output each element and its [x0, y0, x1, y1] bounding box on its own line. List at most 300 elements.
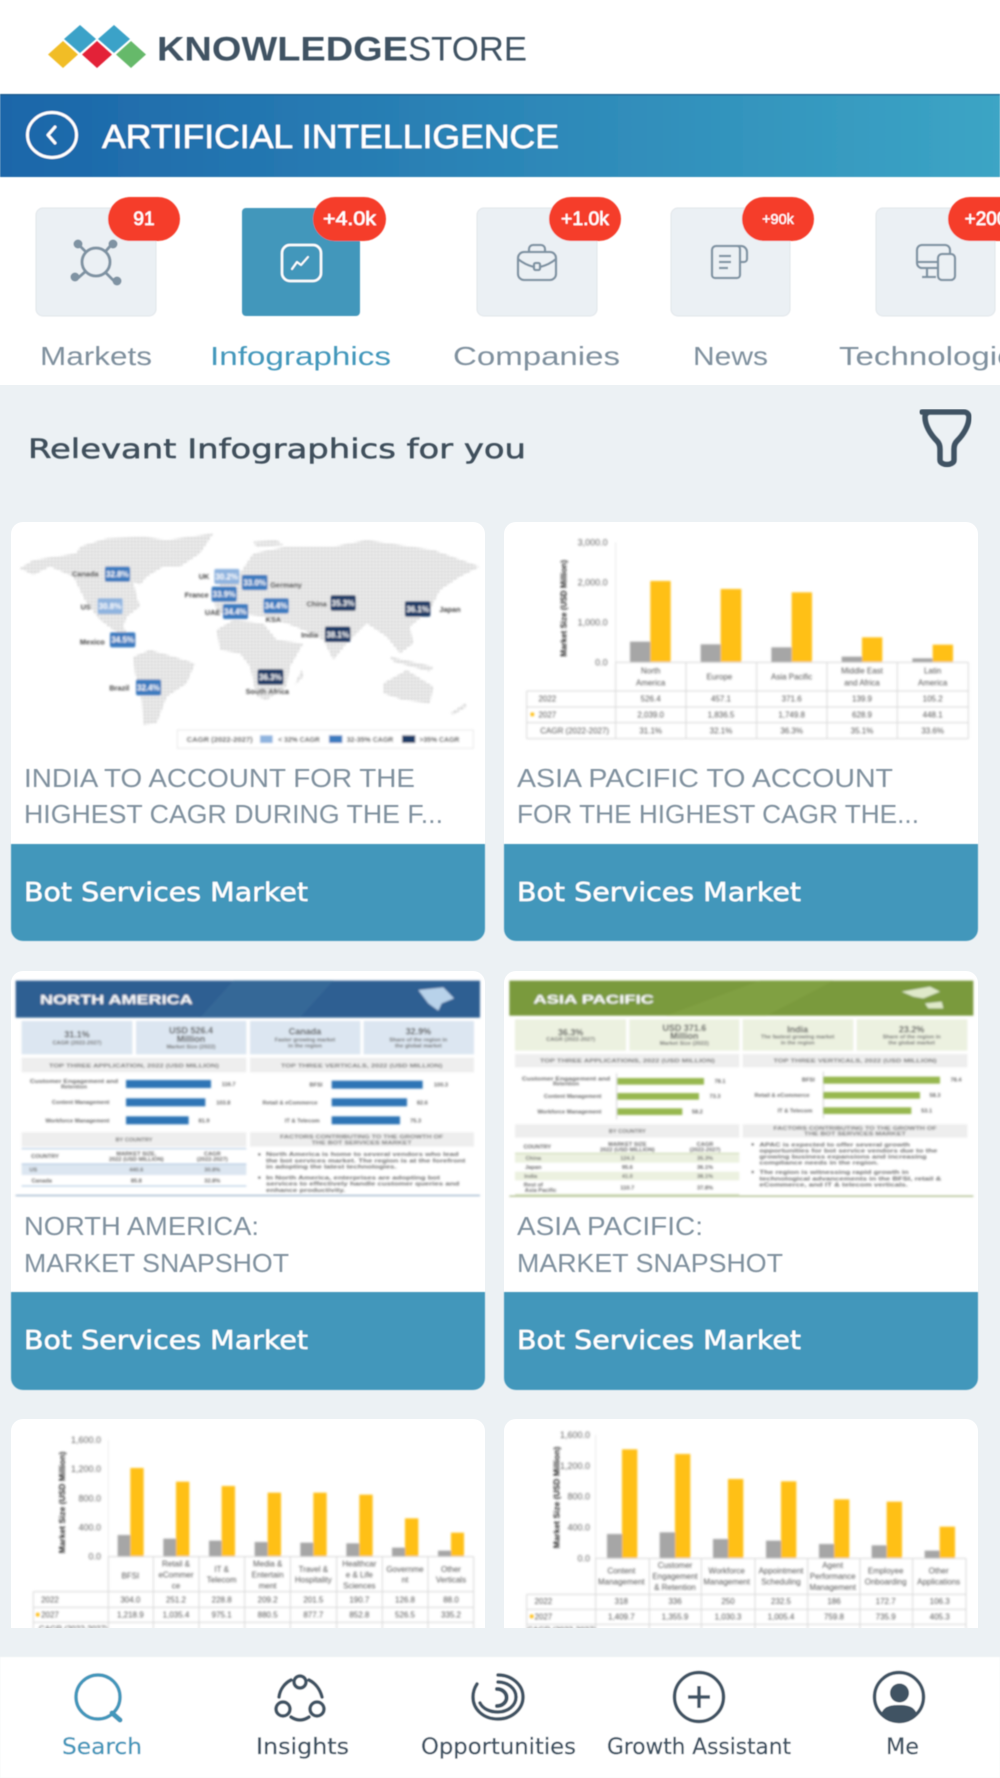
- snapshot country table: 37.8%: [697, 1185, 713, 1191]
- chart data table: Travel &: [299, 1565, 329, 1574]
- icon: briefcase: [518, 245, 556, 280]
- chart data table: Healthcar: [342, 1560, 377, 1569]
- chart data table: Media &: [253, 1560, 283, 1569]
- chart data table: 759.8: [824, 1612, 845, 1621]
- snapshot KPI boxes: CAGR (2022-2027): [52, 1040, 102, 1046]
- snapshot growth factors: [752, 1142, 941, 1189]
- map callouts: UAE: [205, 608, 221, 617]
- label: News: News: [693, 341, 768, 371]
- chart data table: Other: [929, 1567, 949, 1576]
- chart data table: ment: [259, 1581, 277, 1590]
- snapshot KPI boxes: 23.2%: [899, 1024, 924, 1034]
- snapshot country table: COUNTRY: [31, 1154, 59, 1160]
- heading: section title: ARTIFICIAL INTELLIGENCE: [102, 118, 559, 155]
- chart data table: 106.3: [930, 1597, 950, 1606]
- map callouts: Brazil: [109, 683, 129, 692]
- icon: insights network: [276, 1676, 324, 1720]
- snapshot bars: Workforce Management: [45, 1118, 109, 1124]
- chart data table: 88.0: [443, 1596, 459, 1605]
- chart data table: & Retention: [654, 1583, 696, 1592]
- snapshot growth factors: enhance productivity.: [266, 1188, 346, 1194]
- snapshot country table: [515, 1142, 739, 1195]
- map legend: 32-35% CAGR: [347, 735, 394, 744]
- snapshot growth factors: [258, 1152, 465, 1194]
- nav item: Insights: [256, 1676, 349, 1760]
- snapshot KPI boxes: [515, 1019, 967, 1051]
- chart data table: 31.1%: [639, 727, 662, 736]
- world map thumbnail: [20, 533, 480, 748]
- map continents: [20, 533, 480, 725]
- chart data table: Entertain: [252, 1571, 284, 1580]
- application bar chart thumbnail: [527, 1430, 966, 1635]
- snapshot country table: MARKET SIZE,: [116, 1151, 157, 1157]
- badge: +4.0k: [313, 197, 386, 241]
- snapshot bars: Retail & eCommerce: [262, 1100, 318, 1106]
- snapshot section headings: TOP THREE APPLICATIONS, 2022 (USD MILLION): [540, 1059, 715, 1065]
- snapshot growth factors: eCommerce, and IT & telecom verticals.: [759, 1183, 909, 1189]
- snapshot bars: Content Management: [52, 1100, 110, 1106]
- chart data table: Customer: [658, 1561, 693, 1570]
- snapshot growth factors: opportunities for bot service vendors due to the: [759, 1148, 937, 1154]
- snapshot bars: Retail & eCommerce: [754, 1093, 810, 1099]
- snapshot country table: 41.0: [622, 1174, 633, 1180]
- chart data table: 250: [721, 1597, 735, 1606]
- snapshot bars: 116.7: [222, 1082, 236, 1088]
- chart data table: Management: [703, 1578, 751, 1587]
- chart bars: [607, 1449, 955, 1558]
- map callouts: 34.4%: [224, 607, 247, 616]
- chart data table: Engagement: [652, 1572, 698, 1581]
- card caption: ASIA PACIFIC:: [517, 1211, 703, 1241]
- map callouts: Germany: [270, 580, 303, 589]
- snapshot growth factors: In North America, enterprises are adopting bot: [266, 1175, 440, 1181]
- nav item: Growth Assistant: Growth Assistant: [607, 1735, 791, 1760]
- badge: +90k: [742, 197, 814, 241]
- snapshot KPI boxes: Million: [670, 1031, 699, 1041]
- snapshot KPI boxes: Faster growing market: [275, 1038, 335, 1044]
- chart data table: 335.2: [441, 1611, 462, 1620]
- card: Asia Pacific to account: [504, 522, 978, 941]
- chart data table: America: [636, 678, 666, 687]
- chart data table: Onboarding: [865, 1578, 907, 1587]
- map callouts: 32.8%: [106, 570, 129, 579]
- chart bars: [118, 1468, 464, 1557]
- snapshot KPI boxes: Share of the region in: [389, 1038, 448, 1044]
- snapshot bars: 82.6: [417, 1100, 428, 1106]
- snapshot bars: 78.1: [714, 1079, 726, 1085]
- snapshot country table: 85.8: [131, 1178, 142, 1184]
- chart axis and labels: Market Size (USD Million): [560, 560, 569, 657]
- snapshot growth factors: The region is witnessing rapid growth in: [759, 1170, 909, 1176]
- snapshot KPI boxes: Market Size (2022): [166, 1045, 216, 1051]
- chart data table: Retail &: [162, 1560, 191, 1569]
- map legend: CAGR (2022-2027): [187, 735, 253, 744]
- chart axis and labels: 3,000.0: [578, 538, 608, 548]
- map callouts: 38.1%: [326, 630, 349, 639]
- title bar: Artificial Intelligence: [0, 94, 1000, 177]
- map callouts: Canada: [72, 570, 99, 579]
- snapshot section headings: THE BOT SERVICES MARKET: [312, 1140, 412, 1146]
- chart axis and labels: 2,000.0: [578, 578, 608, 588]
- chart data table: 2027: [41, 1611, 59, 1620]
- chart data table: 33.6%: [921, 727, 944, 736]
- snapshot country table: COUNTRY: [523, 1145, 551, 1151]
- vertical bar chart thumbnail: [33, 1435, 474, 1634]
- badge: 91: 91: [133, 209, 155, 230]
- chart data table: 526.4: [641, 694, 661, 703]
- snapshot country table: 2022 (USD MILLION): [109, 1157, 164, 1163]
- snapshot bars: Workforce Management: [537, 1109, 601, 1115]
- chart axis and labels: 0.0: [88, 1552, 101, 1562]
- snapshot section headings: BY COUNTRY: [115, 1137, 153, 1143]
- label: Infographics: Infographics: [210, 341, 391, 371]
- snapshot banner: ASIA PACIFIC: [533, 992, 654, 1006]
- chart data table: CAGR (2022-2027): [540, 727, 609, 736]
- snapshot bars: Customer Engagement and: [30, 1079, 119, 1085]
- chart data table: 628.9: [852, 710, 873, 719]
- snapshot bars: 78.4: [950, 1078, 962, 1084]
- nav item: Opportunities: [421, 1675, 576, 1760]
- chart data table: 251.2: [166, 1596, 187, 1605]
- card footer: Bot Services Market: Bot Services Market: [517, 878, 801, 908]
- snapshot bars: 58.3: [929, 1093, 941, 1099]
- chart data table: Scheduling: [761, 1578, 801, 1587]
- chart axis and labels: [552, 1430, 596, 1563]
- chart axis and labels: 400.0: [79, 1523, 101, 1533]
- chart data table: 228.8: [212, 1596, 232, 1605]
- card: verticals bar chart (cut off): [11, 1419, 485, 1634]
- card caption: [517, 1211, 783, 1278]
- snapshot section headings: BY COUNTRY: [609, 1129, 646, 1135]
- card caption: [24, 1211, 289, 1278]
- badge: +90k: +90k: [762, 212, 795, 228]
- chart axis and labels: 1,600.0: [71, 1435, 101, 1445]
- icon: chart card: [282, 245, 321, 281]
- card caption: [517, 763, 919, 829]
- card caption: MARKET SNAPSHOT: [517, 1248, 783, 1278]
- card footer: Bot Services Market: [504, 844, 978, 941]
- snapshot country table: MARKET SIZE: [608, 1142, 647, 1148]
- map callouts: India: [301, 630, 319, 639]
- chart data table: 209.2: [258, 1596, 278, 1605]
- chart data table: Applications: [917, 1578, 960, 1587]
- chart data table: nt: [402, 1576, 409, 1585]
- snapshot bars: 100.3: [434, 1083, 448, 1089]
- snapshot bars: [522, 1072, 962, 1119]
- snapshot bars: 81.9: [198, 1118, 210, 1124]
- snapshot bars: Retention: [61, 1084, 88, 1090]
- chart data table: 2022: [538, 694, 557, 703]
- badge: 91: [108, 197, 180, 241]
- badge: +4.0k: +4.0k: [323, 209, 377, 230]
- snapshot country table: Japan: [525, 1165, 542, 1171]
- snapshot bars: 58.2: [692, 1109, 703, 1115]
- snapshot country table: (2022-2027): [197, 1157, 228, 1163]
- chart data table: 32.1%: [710, 727, 732, 736]
- map callouts: France: [185, 590, 209, 599]
- chart data table: 36.3%: [780, 727, 803, 736]
- snapshot country table: 124.3: [620, 1156, 634, 1162]
- snapshot KPI boxes: 31.1%: [64, 1030, 90, 1040]
- chart data table: 35.1%: [851, 727, 873, 736]
- card caption: INDIA TO ACCOUNT FOR THE: [24, 763, 415, 793]
- snapshot section headings: TOP THREE APPLICATION, 2022 (USD MILLION): [49, 1063, 219, 1069]
- snapshot country table: India: [524, 1174, 538, 1180]
- snapshot KPI boxes: Market Size (2022): [660, 1041, 709, 1047]
- snapshot bars: Retention: [553, 1081, 580, 1087]
- snapshot growth factors: growing business expansions and increasing: [759, 1155, 927, 1161]
- chart data table: 371.6: [782, 694, 802, 703]
- label: Technologies: Technologies: [839, 341, 1000, 371]
- chart data table: 304.0: [120, 1596, 141, 1605]
- snapshot growth factors: compliance needs in the region.: [759, 1160, 879, 1166]
- snapshot KPI boxes: 36.3%: [558, 1027, 583, 1037]
- snapshot KPI boxes: the global market: [395, 1044, 442, 1050]
- chart data table: 1,409.7: [608, 1612, 635, 1621]
- chart axis and labels: 0.0: [577, 1553, 590, 1563]
- nav item: Insights: Insights: [256, 1735, 349, 1760]
- chart data table: CAGR (2022-2027): [527, 1626, 596, 1635]
- chart data table: 1,005.4: [768, 1612, 795, 1621]
- chart data table: 735.9: [876, 1612, 896, 1621]
- chart data table: North: [641, 666, 660, 675]
- snapshot country table: China: [525, 1156, 542, 1162]
- chart data table: 457.1: [711, 694, 732, 703]
- nav item: Search: Search: [62, 1735, 142, 1760]
- map callouts: KSA: [266, 615, 282, 624]
- card caption: HIGHEST CAGR DURING THE F...: [24, 799, 443, 829]
- logo wordmark: [157, 30, 527, 68]
- snapshot section headings: [515, 1054, 967, 1138]
- snapshot KPI boxes: [22, 1021, 474, 1054]
- card caption: MARKET SNAPSHOT: [24, 1248, 289, 1278]
- chart data table: Content: [607, 1567, 636, 1576]
- chart data table: Asia Pacific: [771, 672, 812, 681]
- snapshot KPI boxes: USD 371.6: [662, 1023, 706, 1033]
- snapshot bars: IT & Telecom: [285, 1118, 320, 1124]
- snapshot section headings: THE BOT SERVICES MARKET: [804, 1132, 907, 1138]
- chart data table: e & Life: [346, 1571, 373, 1580]
- chart data table: Telecom: [207, 1576, 237, 1585]
- chart data table: 975.1: [212, 1611, 232, 1620]
- chart data table: 232.5: [771, 1597, 792, 1606]
- chart data table: 1,035.4: [163, 1611, 190, 1620]
- logo diamonds: [48, 25, 146, 68]
- chart data table: 1,355.9: [662, 1612, 689, 1621]
- snapshot KPI boxes: the global market: [888, 1040, 935, 1046]
- snapshot country table: 2022 (USD MILLION): [600, 1147, 655, 1153]
- card: applications bar chart (cut off): [504, 1419, 978, 1635]
- chart data table: 405.3: [930, 1612, 950, 1621]
- badge: +1.0k: +1.0k: [561, 209, 610, 230]
- nav item: Growth Assistant: [607, 1672, 791, 1760]
- chart data table: 336: [668, 1597, 682, 1606]
- snapshot growth factors: APAC is expected to offer several growth: [759, 1142, 911, 1148]
- Asia Pacific snapshot thumbnail: [509, 981, 973, 1197]
- icon: plus circle: [674, 1672, 724, 1722]
- snapshot bars: [30, 1079, 448, 1124]
- chart data table: Middle East: [841, 666, 884, 675]
- bottom navigation bar: [0, 1657, 1000, 1778]
- icon: search: [76, 1675, 120, 1720]
- map legend: < 32% CAGR: [278, 735, 320, 744]
- map callouts: China: [306, 600, 328, 609]
- map callouts: Japan: [439, 605, 461, 614]
- badge: +1.0k: [549, 197, 621, 241]
- snapshot KPI boxes: Share of the region in: [883, 1034, 941, 1040]
- chart data table: 880.5: [258, 1611, 278, 1620]
- chart data table: 448.1: [923, 710, 943, 719]
- chart data table: BFSI: [121, 1571, 139, 1580]
- snapshot country table: 32.8%: [204, 1178, 220, 1184]
- snapshot KPI boxes: 32.9%: [406, 1027, 431, 1037]
- card footer: Bot Services Market: [504, 1292, 978, 1390]
- chart data table: Other: [441, 1565, 461, 1574]
- chart axis and labels: 800.0: [568, 1492, 590, 1502]
- chart data table: [527, 662, 968, 739]
- snapshot country table: 440.6: [129, 1167, 143, 1173]
- nav item: Search: [62, 1675, 142, 1760]
- tab: Technologies: [839, 197, 1000, 371]
- snapshot KPI boxes: CAGR (2022-2027): [546, 1037, 595, 1043]
- chart axis and labels: 400.0: [568, 1522, 590, 1532]
- chart axis and labels: [560, 538, 616, 668]
- map callouts: Mexico: [80, 637, 105, 646]
- snapshot bars: 73.3: [709, 1094, 721, 1100]
- chart data table: 2027: [538, 710, 557, 719]
- chart data table: 172.7: [876, 1597, 896, 1606]
- chart data table: Hospitality: [295, 1576, 332, 1585]
- snapshot bars: 53.1: [921, 1108, 932, 1114]
- chart data table: [527, 1558, 966, 1635]
- nav item: Opportunities: Opportunities: [421, 1735, 576, 1760]
- logo wordmark: KNOWLEDGE: [157, 30, 408, 68]
- chart data table: 877.7: [303, 1611, 324, 1620]
- chart data table: 2027: [534, 1612, 553, 1621]
- chart axis and labels: 1,200.0: [71, 1464, 101, 1474]
- snapshot KPI boxes: Canada: [289, 1027, 322, 1037]
- chart data table: 852.8: [349, 1611, 370, 1620]
- snapshot growth factors: in adopting the latest technologies.: [266, 1165, 397, 1171]
- snapshot growth factors: services to effectively handle customer queries and: [266, 1182, 460, 1188]
- card footer: Bot Services Market: [11, 844, 485, 941]
- snapshot country table: 38.1%: [697, 1174, 713, 1180]
- label: Markets: Markets: [40, 341, 152, 371]
- chart axis and labels: [57, 1435, 102, 1561]
- map callouts: US: [81, 603, 91, 612]
- map legend: [177, 730, 473, 748]
- icon: profile: [874, 1672, 924, 1722]
- snapshot banner: [509, 981, 973, 1016]
- snapshot KPI boxes: in the region: [781, 1040, 815, 1046]
- chart data table: Management: [598, 1578, 645, 1587]
- chart data table: 190.7: [349, 1596, 370, 1605]
- North America snapshot thumbnail: [16, 981, 480, 1196]
- snapshot country table: CAGR: [204, 1151, 221, 1157]
- chart data table: 1,218.9: [117, 1611, 144, 1620]
- chart data table: 126.8: [395, 1596, 416, 1605]
- chart data table: Agent: [822, 1561, 844, 1570]
- snapshot KPI boxes: India: [787, 1024, 809, 1034]
- snapshot country table: 110.7: [620, 1185, 634, 1191]
- chart data table: 201.5: [303, 1596, 324, 1605]
- chart data table: IT &: [214, 1565, 230, 1574]
- tab: News: [671, 197, 814, 371]
- label: Companies: Companies: [453, 341, 620, 371]
- snapshot bars: 103.8: [216, 1100, 230, 1106]
- snapshot KPI boxes: Million: [177, 1034, 205, 1044]
- snapshot country table: [22, 1149, 246, 1186]
- snapshot country table: 36.1%: [697, 1165, 713, 1171]
- chart data table: eCommer: [158, 1571, 194, 1580]
- chart data table: Employee: [868, 1567, 904, 1576]
- card caption: NORTH AMERICA:: [24, 1211, 259, 1241]
- snapshot growth factors: the bot services market. The region is at the forefront: [266, 1158, 465, 1164]
- chart data table: 1,836.5: [708, 710, 735, 719]
- chart data table: [33, 1557, 474, 1634]
- snapshot section headings: FACTORS CONTRIBUTING TO THE GROWTH OF: [773, 1126, 937, 1132]
- chart data table: Latin: [924, 666, 941, 675]
- chart data table: Sciences: [343, 1581, 376, 1590]
- chart axis and labels: 0.0: [595, 658, 608, 668]
- chart data table: Europe: [706, 672, 733, 681]
- chart data table: 186: [827, 1597, 841, 1606]
- chart axis and labels: 1,000.0: [578, 618, 608, 628]
- card: North America snapshot: [11, 971, 485, 1390]
- map callouts: 36.1%: [406, 605, 429, 614]
- snapshot country table: (2022-2027): [690, 1147, 721, 1153]
- nav item: Me: Me: [886, 1735, 919, 1760]
- card footer: Bot Services Market: Bot Services Market: [517, 1326, 801, 1356]
- snapshot bars: Customer Engagement and: [522, 1076, 611, 1082]
- snapshot section headings: [22, 1058, 474, 1147]
- chart data table: 2,039.0: [637, 710, 665, 719]
- chart data table: 2022: [41, 1596, 59, 1605]
- map callouts: 32.4%: [137, 683, 160, 692]
- chart bars: [630, 581, 953, 662]
- snapshot KPI boxes: USD 526.4: [169, 1025, 213, 1035]
- snapshot country table: Asia Pacific: [525, 1188, 557, 1194]
- map callouts: UK: [199, 572, 210, 581]
- logo wordmark: STORE: [408, 30, 527, 68]
- map callouts: 34.5%: [111, 636, 134, 645]
- chart data table: Performance: [810, 1572, 856, 1581]
- chart axis and labels: Market Size (USD Million): [552, 1446, 561, 1548]
- chart data table: 105.2: [923, 694, 943, 703]
- map callouts: 33.9%: [213, 590, 235, 599]
- chart data table: Management: [809, 1583, 857, 1592]
- chart data table: Appointment: [759, 1567, 804, 1576]
- chart axis and labels: 1,600.0: [560, 1430, 590, 1440]
- chart data table: Verticals: [436, 1576, 466, 1585]
- snapshot country table: CAGR: [697, 1142, 713, 1148]
- tab: Infographics (active): [210, 197, 391, 371]
- snapshot section headings: TOP THREE VERTICALS, 2022 (USD MILLION): [773, 1059, 937, 1065]
- chart axis and labels: Market Size (USD Million): [58, 1451, 67, 1553]
- icon: back arrow: [28, 112, 76, 158]
- heading: Relevant Infographics for you: Relevant Infographics for you: [28, 434, 526, 465]
- icon: news document: [712, 246, 747, 278]
- map callouts: 34.4%: [265, 602, 287, 611]
- map callouts: [72, 567, 461, 696]
- map callouts: 30.8%: [99, 602, 121, 611]
- tab: Markets: [36, 197, 180, 371]
- snapshot country table: 95.6: [622, 1165, 633, 1171]
- nav item: Me: [874, 1672, 924, 1760]
- icon: network: [70, 240, 122, 286]
- card footer: Bot Services Market: Bot Services Market: [24, 878, 308, 908]
- icon: opportunities spiral: [473, 1675, 523, 1719]
